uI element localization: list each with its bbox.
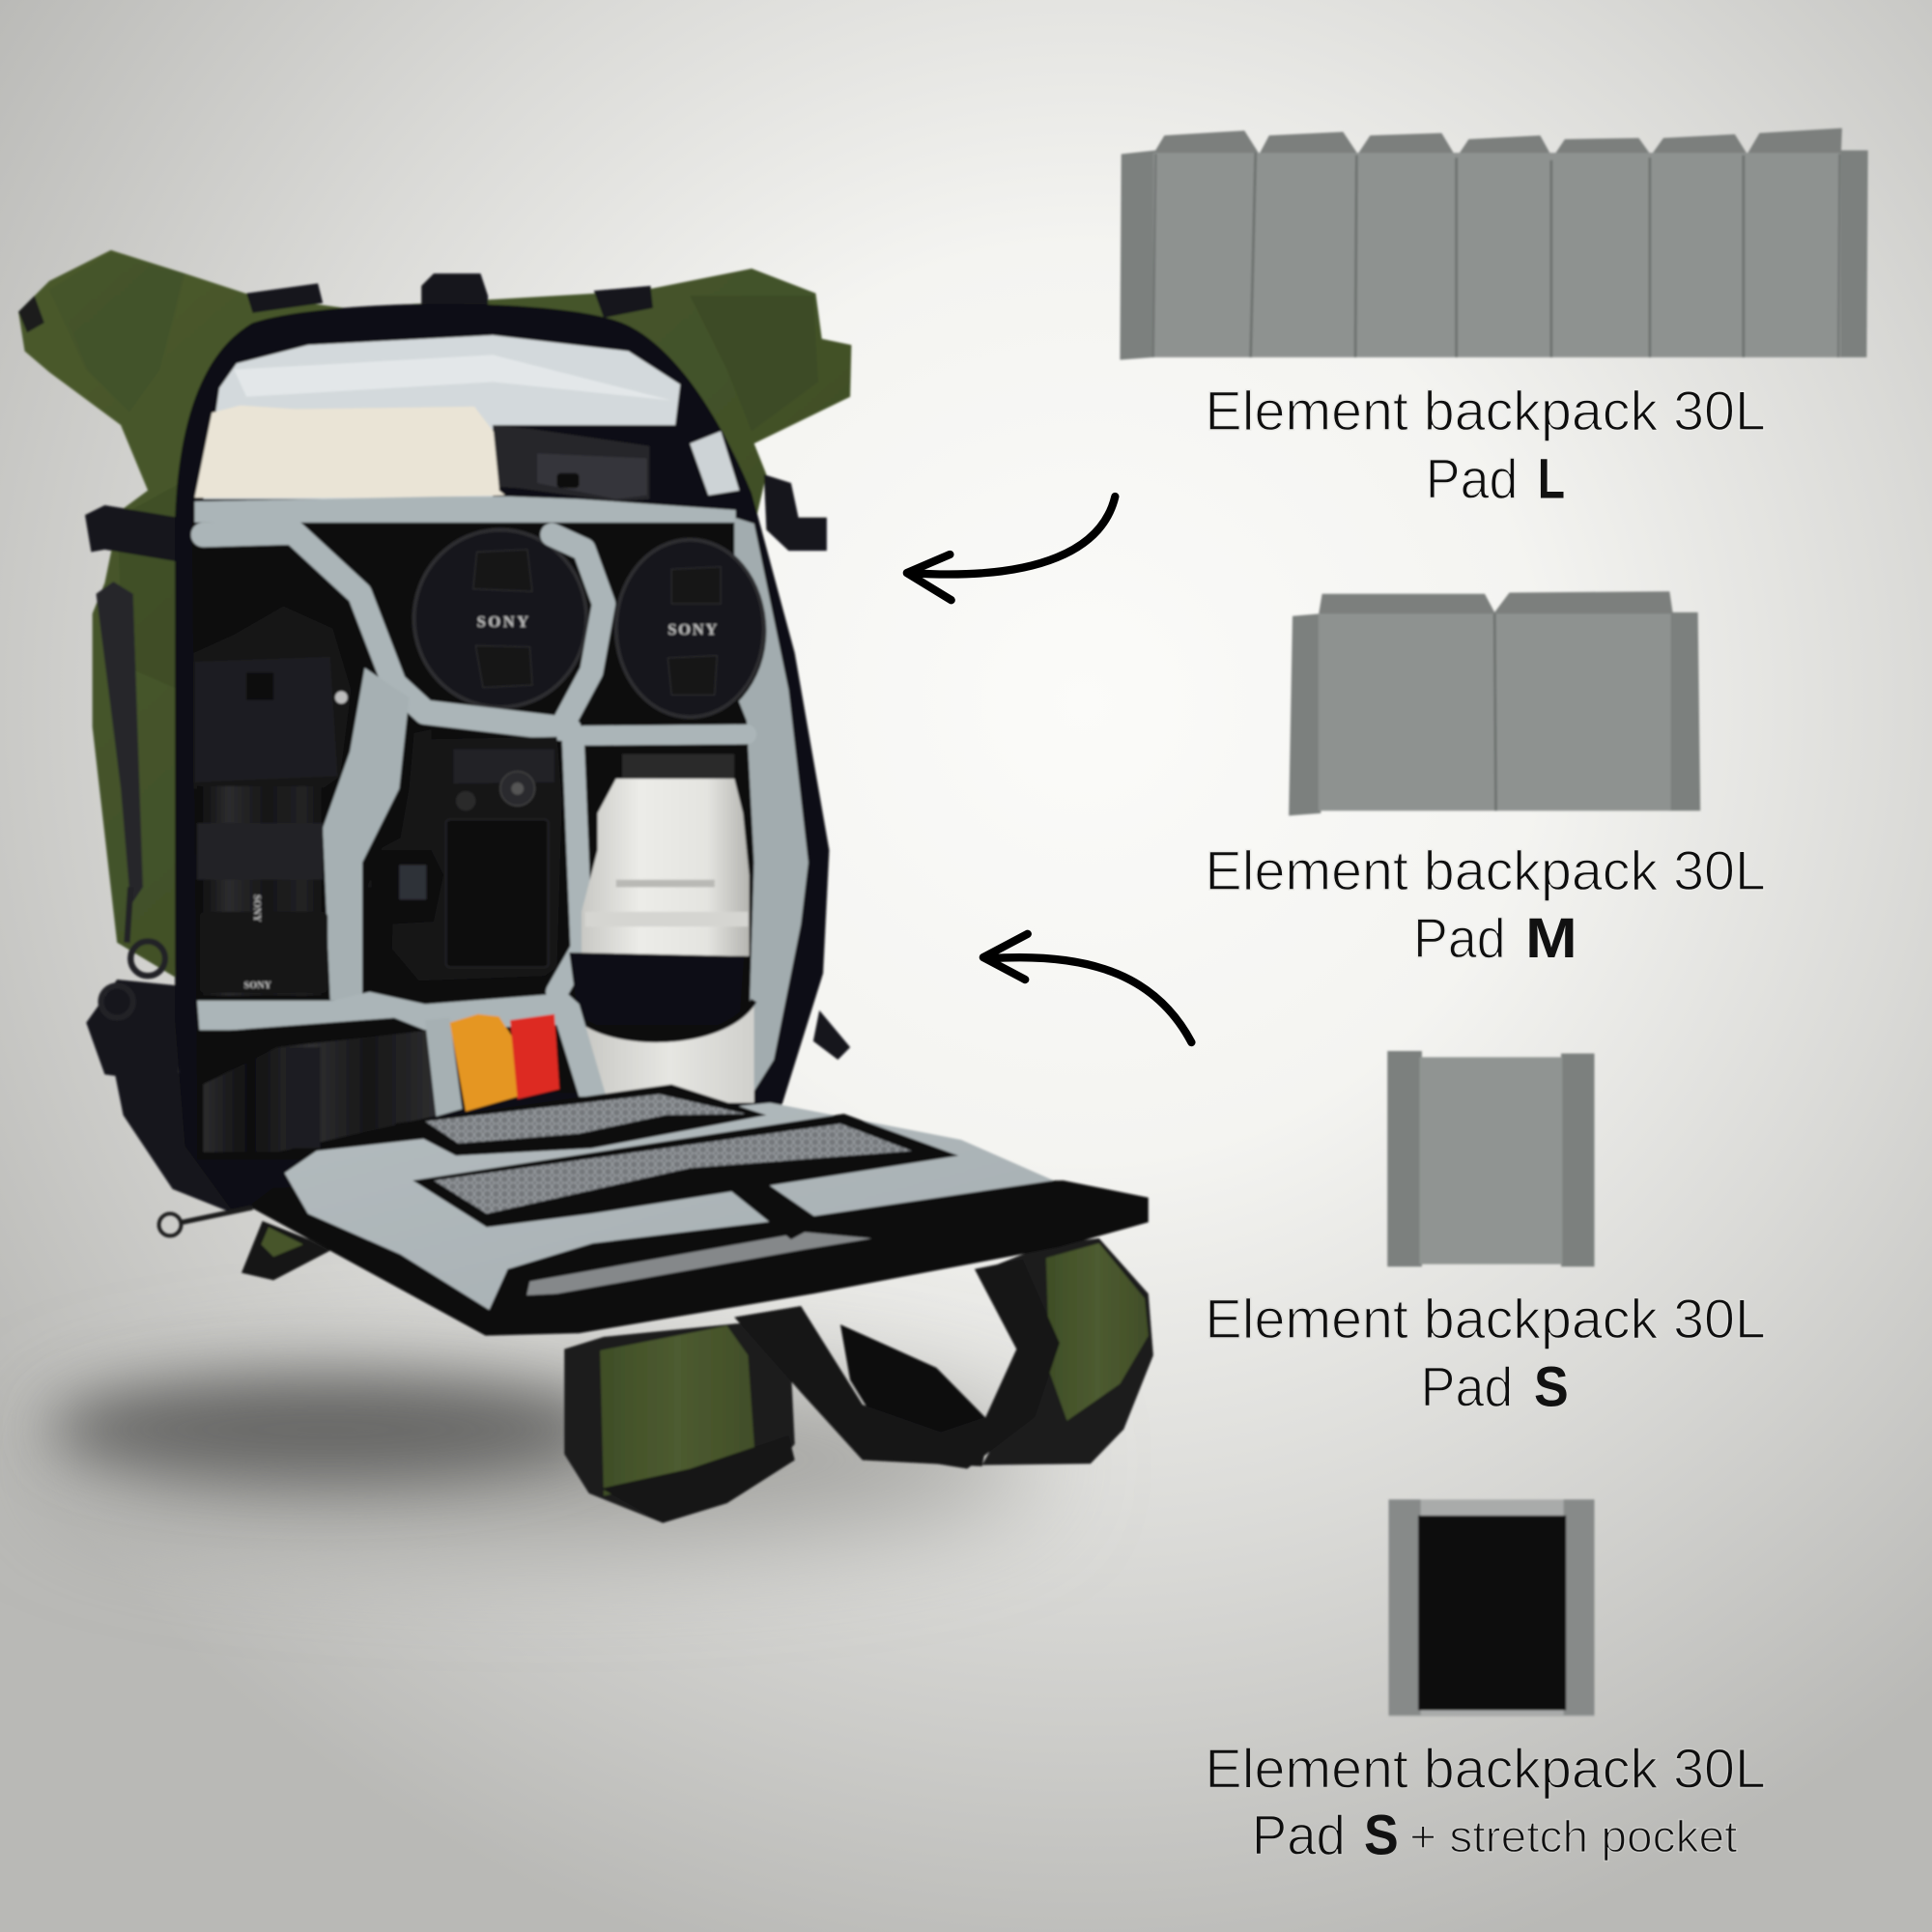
divider next to lens <box>425 1018 462 1117</box>
label: pad M <box>1205 840 1766 970</box>
velcro strap <box>721 1173 823 1239</box>
white telephoto lens <box>569 754 754 1103</box>
red drive <box>510 1014 559 1099</box>
flap lower black edge <box>249 1180 1149 1336</box>
sony lens two: SONY <box>668 620 717 639</box>
label: pad L: L <box>1538 447 1565 510</box>
green roll-top body <box>18 250 851 977</box>
wide lens lying flat <box>197 1030 439 1159</box>
pad L photo <box>1120 128 1868 359</box>
label: pad L: Element backpack 30L <box>1205 381 1766 442</box>
label: pad S: Element backpack 30L <box>1205 1289 1766 1350</box>
right side felt wall <box>734 518 809 1103</box>
small green tab <box>242 1221 330 1280</box>
webbing straps and buckles <box>85 273 850 1213</box>
label: pad S stretch pocket <box>1205 1739 1766 1867</box>
sony lens one: SONY <box>477 612 528 631</box>
laptop edge <box>508 1195 1023 1296</box>
label: pad S: S <box>1534 1355 1569 1418</box>
left camera with lens <box>193 607 352 996</box>
mesh pocket two <box>412 1114 958 1227</box>
felt shelf <box>195 497 735 525</box>
label: pad M: Element backpack 30L <box>1205 840 1766 902</box>
orange drive <box>450 1014 518 1112</box>
flap black binding <box>489 1182 1146 1321</box>
label: pad S stretch pocket: Element backpack 30L <box>1205 1739 1766 1801</box>
arrow to backpack lower <box>983 934 1191 1042</box>
zipper pull and ring <box>101 887 165 1018</box>
sony lens two <box>604 537 766 724</box>
backpack photo illustration <box>18 250 1153 1523</box>
shoulder straps <box>564 1238 1153 1523</box>
folded cream towel <box>195 406 505 497</box>
floor shadow <box>49 1378 1035 1540</box>
interior upper compartment <box>203 335 739 499</box>
felt vertical divider <box>323 668 409 1001</box>
label: pad L: Pad <box>1426 448 1518 510</box>
label: pad S stretch pocket: S <box>1364 1804 1399 1867</box>
pad S photo <box>1387 1051 1595 1266</box>
grey felt front flap <box>285 1103 1054 1310</box>
arrow to backpack upper <box>907 497 1115 600</box>
label: pad M: M <box>1525 907 1577 970</box>
left camera with lens: SONY <box>244 980 271 991</box>
felt dividers <box>203 532 747 992</box>
label: pad S: Pad <box>1421 1356 1513 1418</box>
label: pad S stretch pocket: + stretch pocket <box>1409 1811 1738 1861</box>
bottom shelf felt <box>197 992 607 1096</box>
left camera with lens: SONY <box>251 895 262 923</box>
mesh pocket one <box>394 1084 766 1155</box>
key ring <box>159 1208 252 1236</box>
sony lens one <box>384 524 586 708</box>
centre camera body <box>367 729 562 980</box>
main cell background <box>192 523 754 1096</box>
label: pad M: Pad <box>1413 908 1506 970</box>
pad S with stretch pocket photo <box>1389 1499 1595 1717</box>
side zip strip <box>96 582 143 906</box>
label: pad S <box>1205 1289 1766 1418</box>
black zipper frame <box>175 304 829 1213</box>
charger <box>493 425 649 501</box>
pad M photo <box>1289 591 1700 815</box>
label: pad S stretch pocket: Pad <box>1252 1805 1346 1867</box>
label: pad L <box>1205 381 1766 510</box>
